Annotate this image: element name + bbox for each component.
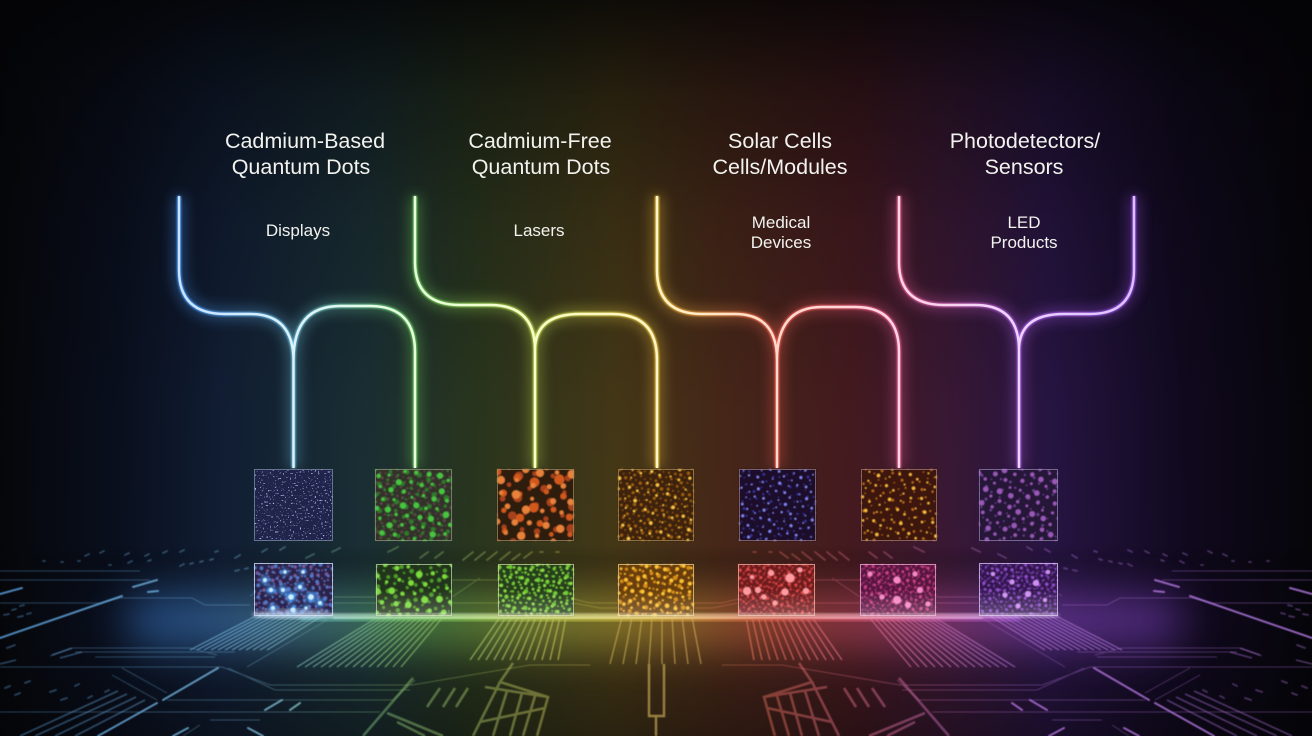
label: Medical Devices: Medical [752,213,810,232]
connector lines: glow [179,196,1134,468]
label: LED Products: Products [990,233,1058,252]
circuit traces: right half [694,547,1312,736]
label: Lasers: Lasers [513,221,565,240]
label: Displays: Displays [266,221,330,240]
heading: Solar Cells Cells/Modules: Solar Cells [728,129,832,153]
bottom row sample 3: fine green [498,564,574,616]
heading: Photodetectors/Sensors: Sensors [985,155,1063,179]
bottom row sample 4: glowing gold [618,564,694,616]
top row sample 2: green dots [375,469,452,541]
label: Medical Devices: Devices [751,233,811,252]
heading: Photodetectors/Sensors: Photodetectors/ [950,129,1100,153]
top row sample 6: amber on maroon [861,469,937,541]
top row sample 5: violet speckle [739,469,816,541]
bottom row sample 2: bright green [376,564,452,616]
heading: Cadmium-Free Quantum Dots: Quantum Dots [472,155,610,179]
bottom row sample 6: glowing magenta [860,564,936,616]
top row sample 7: purple dots [979,469,1058,541]
floor glow band [130,598,1180,644]
circuit traces: left half [0,547,618,736]
label: LED Products: LED [1007,213,1041,232]
top row sample 1: blue fine dots [254,469,333,541]
connector lines: neon core [179,196,1134,468]
lit contacts under samples [253,609,1058,619]
bottom row sample 1: glowing blue [254,563,333,616]
bottom row sample 5: glowing red [738,564,815,616]
top row sample 4: gold speckle [618,469,694,541]
heading: Solar Cells Cells/Modules: Cells/Modules [712,155,848,179]
top row sample 3: orange particles [497,469,574,541]
heading: Cadmium-Based Quantum Dots: Cadmium-Based [225,129,385,153]
bottom row sample 7: glowing purple [979,563,1058,616]
heading: Cadmium-Free Quantum Dots: Cadmium-Free [468,129,612,153]
circuit traces: centre [610,617,701,736]
heading: Cadmium-Based Quantum Dots: Quantum Dots [232,155,370,179]
